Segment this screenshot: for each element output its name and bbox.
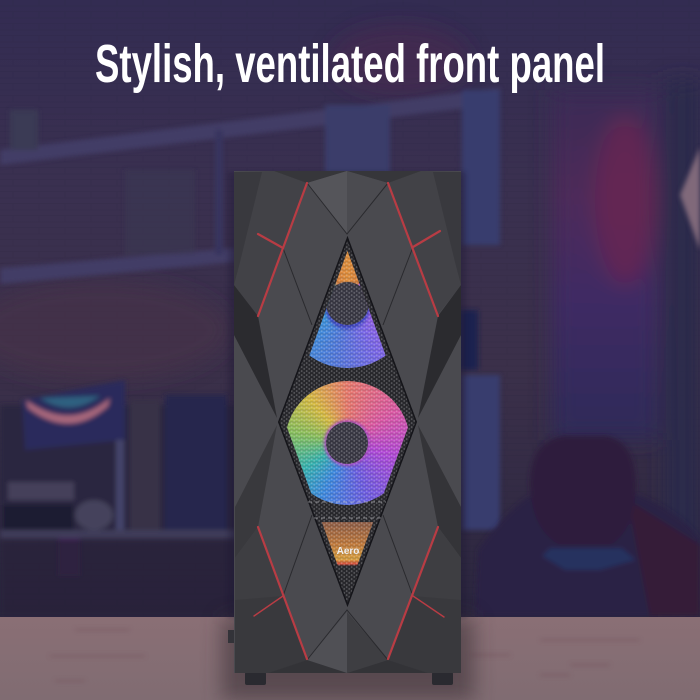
wall decoration	[680, 147, 700, 250]
facet seams	[283, 183, 413, 660]
table top	[0, 617, 700, 700]
centre RGB fan	[285, 381, 410, 505]
gap above upper hub	[329, 288, 366, 302]
shelves	[0, 88, 500, 530]
front mesh with RGB fans	[278, 236, 417, 607]
upper RGB fan	[309, 251, 386, 368]
bottom facets	[268, 612, 428, 673]
red accent lines	[254, 183, 444, 659]
lower RGB fan	[322, 522, 374, 566]
upper side facets	[234, 171, 461, 418]
upper fan hub	[326, 282, 369, 325]
left shelf objects	[0, 380, 235, 616]
centre fan hub	[326, 422, 368, 464]
lower side facets	[235, 425, 461, 673]
feet	[226, 630, 453, 685]
case shadow	[222, 617, 474, 700]
Aero logo: Aero	[337, 546, 359, 557]
gaming chair	[475, 436, 700, 616]
case body	[234, 171, 461, 673]
mesh perforation	[278, 236, 417, 607]
top facets	[274, 171, 421, 234]
PC case front panel	[228, 171, 461, 685]
